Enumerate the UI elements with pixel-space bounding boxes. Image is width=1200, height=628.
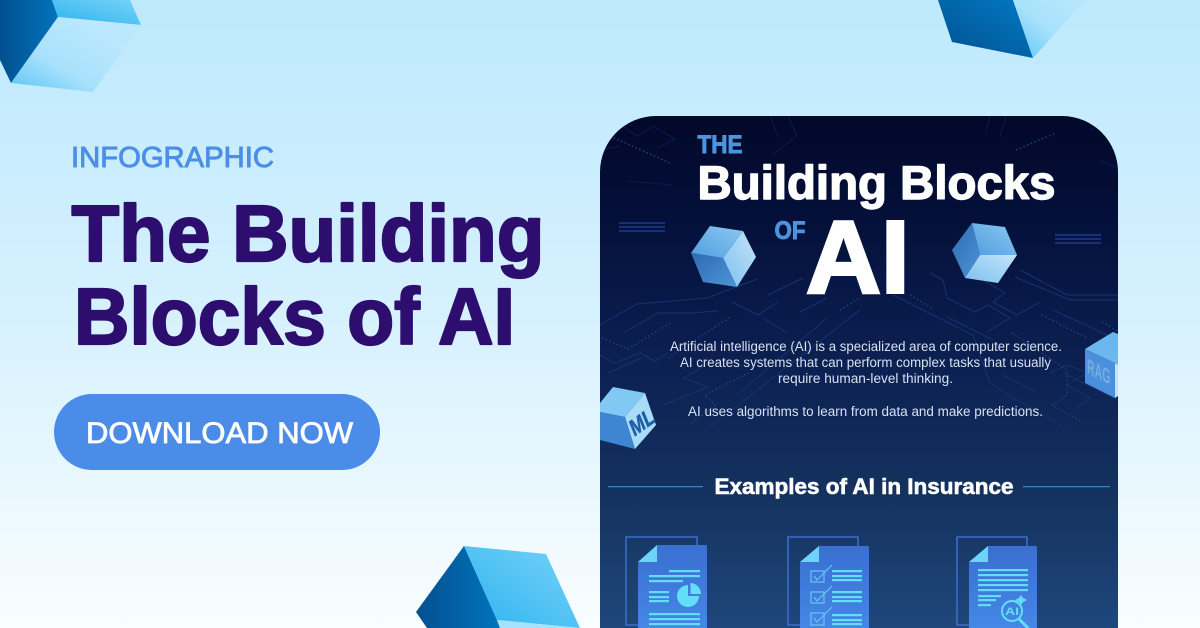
download button: DOWNLOAD NOW	[86, 417, 354, 450]
panel: infographic preview	[600, 116, 1118, 628]
decorative cube: bottom centre	[416, 546, 580, 628]
intro paragraph: AI creates systems that can perform complex tasks that usually	[680, 355, 1051, 370]
icon: left cube	[691, 226, 756, 287]
main heading: Blocks of AI	[74, 272, 515, 361]
label: infographic: INFOGRAPHIC	[71, 142, 274, 174]
main heading: The Building	[72, 189, 544, 278]
icon: ML cube	[600, 387, 658, 449]
intro paragraph: AI uses algorithms to learn from data and make predictions.	[688, 404, 1043, 419]
icon: right cube	[952, 223, 1017, 283]
panel title: AI	[806, 220, 904, 294]
intro paragraph: Artificial intelligence (AI) is a specialized area of computer science.	[670, 339, 1062, 354]
decorative cube: top left	[0, 0, 141, 92]
icon: RAG cube: RAG	[1087, 355, 1110, 390]
panel title: AI: A	[806, 200, 881, 314]
panel title: building blocks: Building Blocks	[698, 156, 1056, 209]
icon: document with AI magnifier	[957, 537, 1037, 628]
icon: RAG cube	[1085, 332, 1118, 398]
icon: ML cube: ML	[626, 402, 658, 442]
download button	[54, 394, 380, 470]
panel title: the: THE	[698, 131, 742, 159]
icon: document with pie chart	[626, 537, 707, 628]
intro paragraph	[670, 339, 1062, 419]
panel title: of: OF	[774, 217, 806, 245]
panel title: AI: I	[881, 200, 910, 314]
intro paragraph: require human-level thinking.	[778, 371, 953, 386]
decorative cube: top right	[938, 0, 1085, 58]
icon: document with checklist	[788, 537, 869, 628]
icon: document with AI magnifier: AI	[1005, 606, 1019, 618]
main heading	[72, 189, 544, 361]
section heading: examples of AI in insurance: Examples of AI in Insurance	[714, 474, 1014, 499]
